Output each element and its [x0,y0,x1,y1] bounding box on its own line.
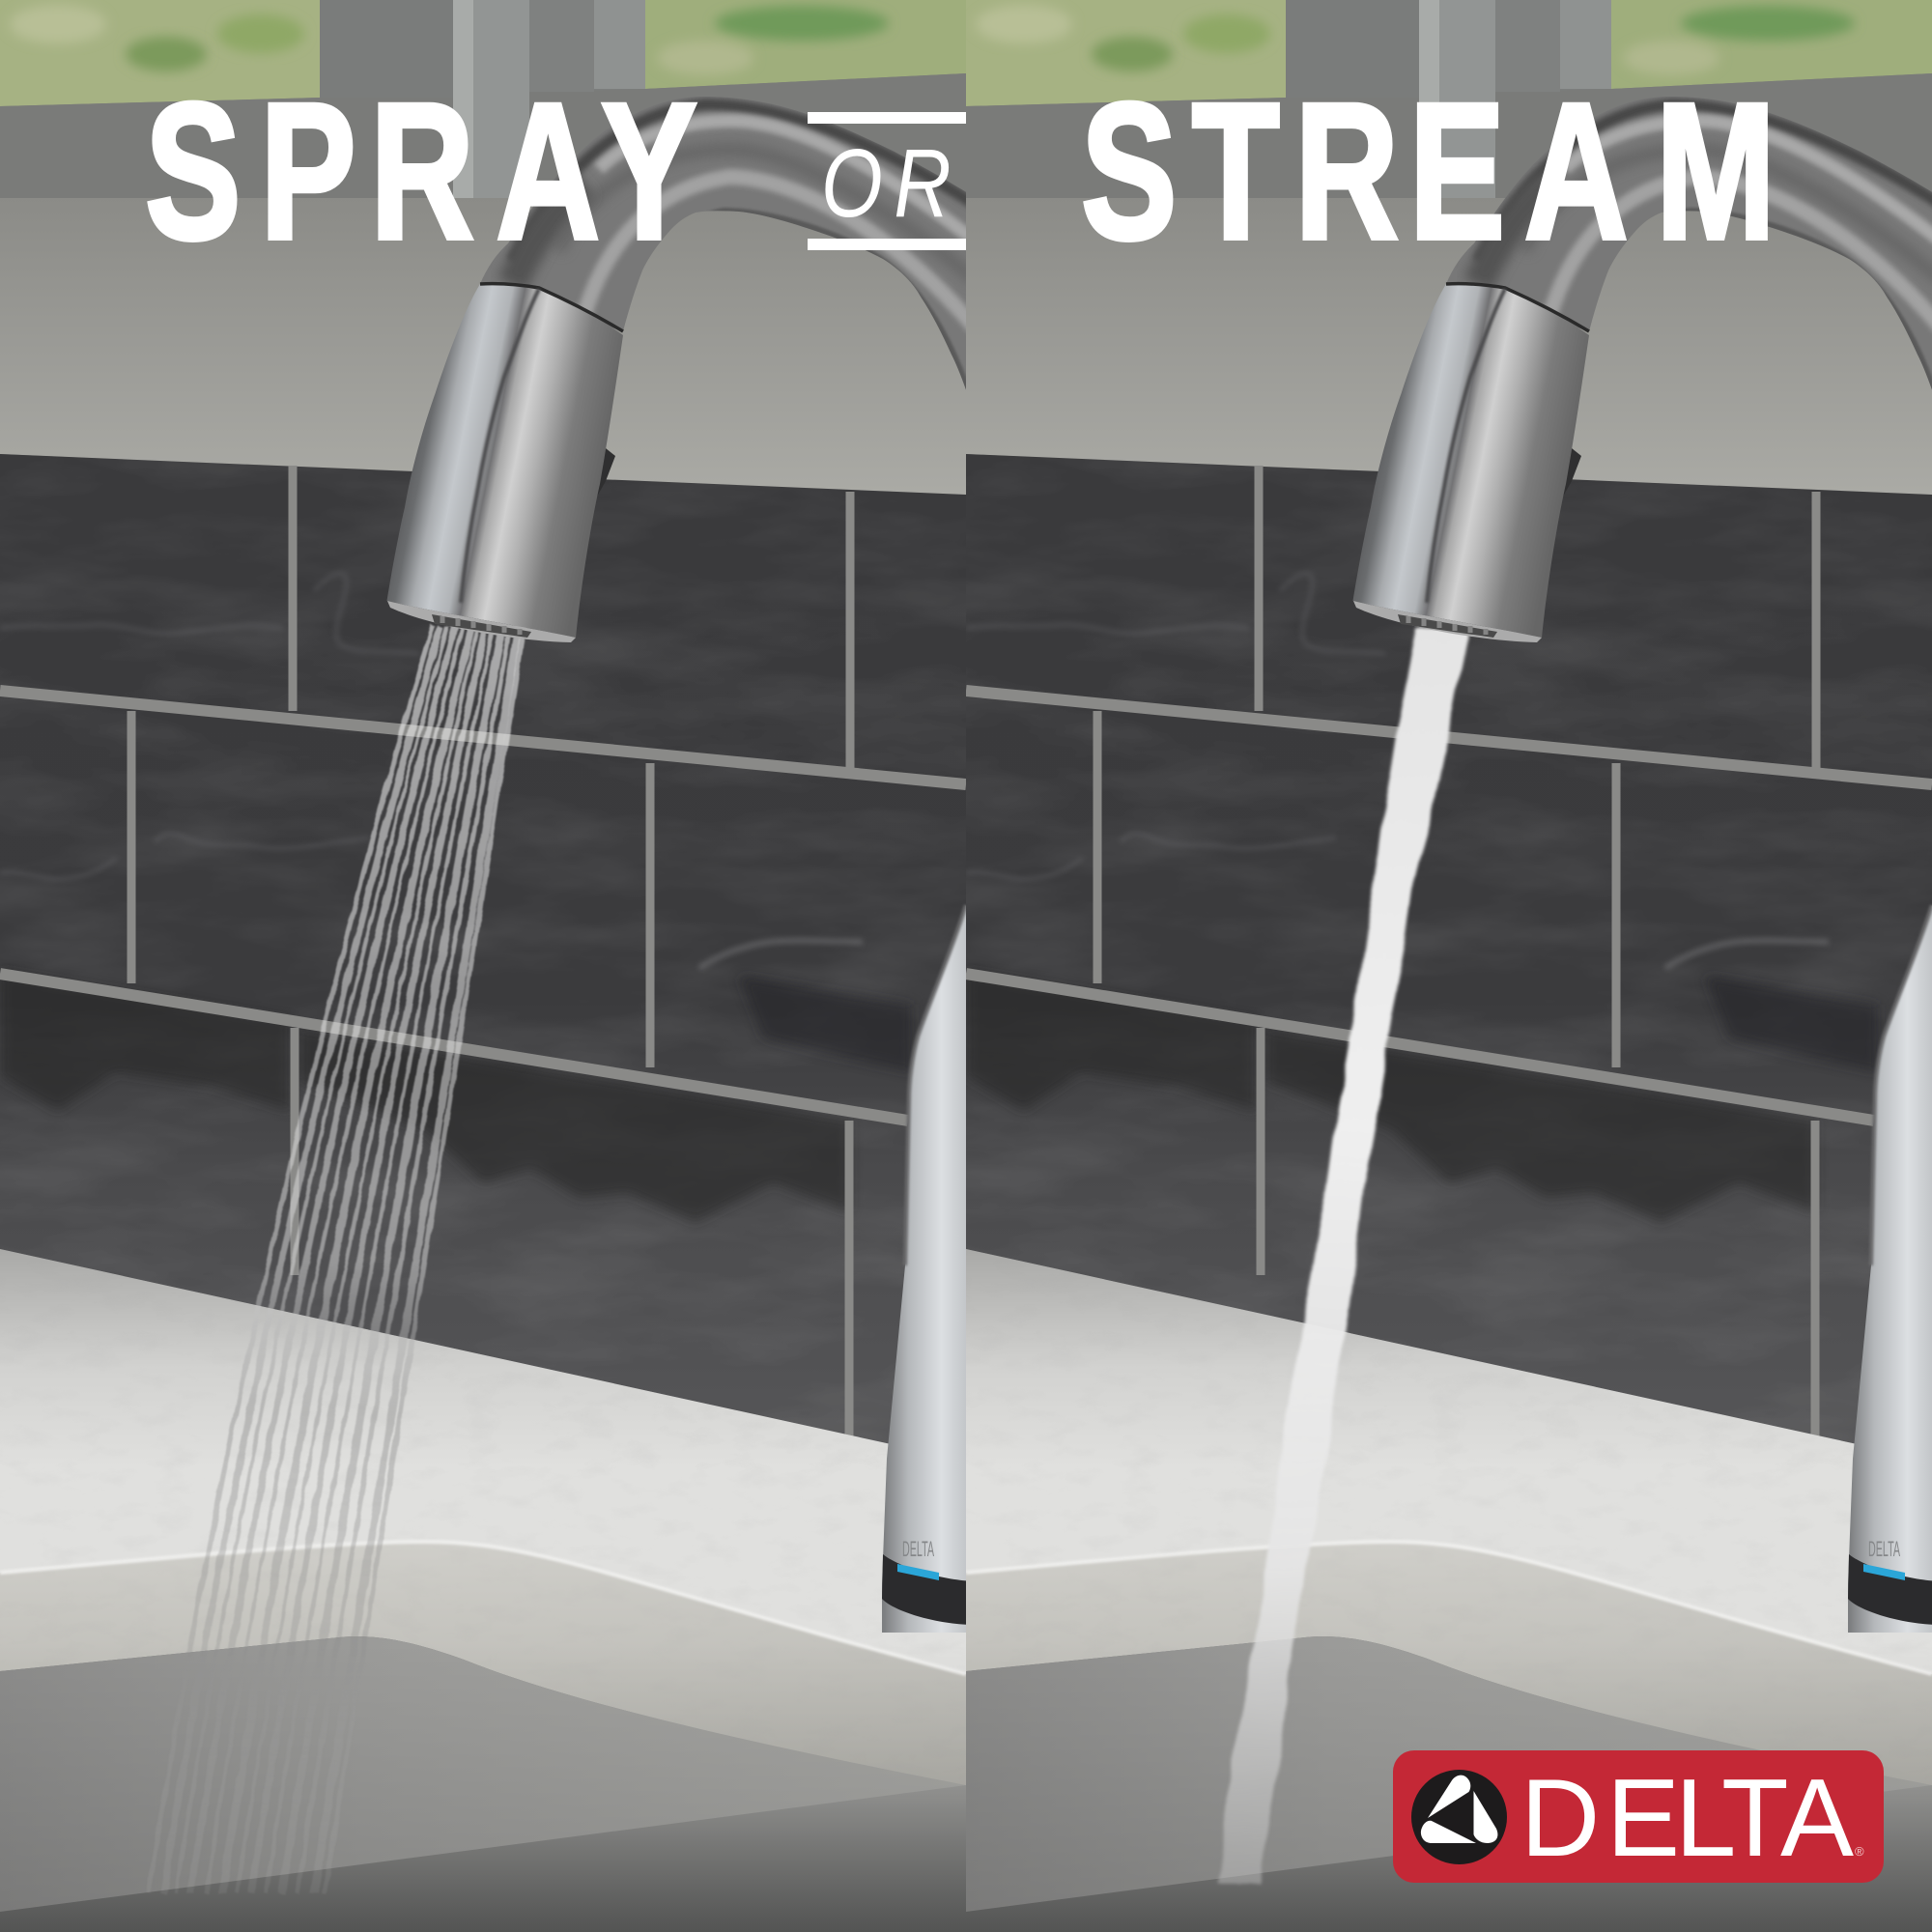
panel: stream [966,0,1932,1932]
water stream [1218,628,1470,1884]
panel: spray [0,0,976,1932]
faucet spout and head [1352,97,1932,642]
heading: STREAM: STREAM [1081,64,1776,280]
tile backsplash [0,454,966,1468]
spray water streaks [149,626,525,1893]
icon: Delta triangle mark [1411,1770,1507,1864]
faucet spout and head [386,97,976,642]
wordmark: DELTA: DELTA [1520,1757,1854,1880]
tile backsplash [966,454,1932,1468]
countertop and sink [966,1249,1932,1932]
heading: SPRAY: SPRAY [145,64,697,280]
logo: Delta [1393,1750,1884,1883]
OR divider: OR [821,129,952,238]
faucet base [882,904,966,1633]
wall and window [966,0,1932,502]
faucet base [1848,869,1932,1633]
registered mark: ® [1855,1844,1864,1859]
countertop and sink [0,1249,966,1932]
OR divider [808,112,966,250]
wall and window [0,0,966,502]
